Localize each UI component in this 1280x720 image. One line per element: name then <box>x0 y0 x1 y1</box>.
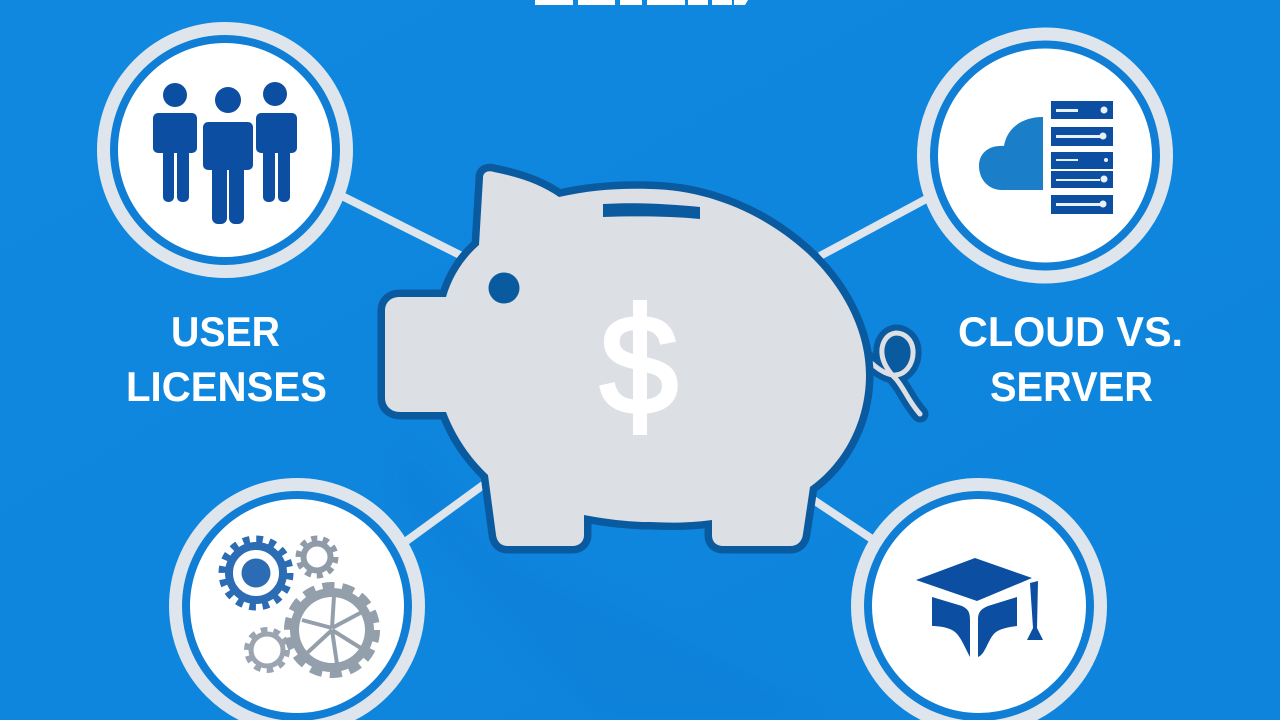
heading: user licenses: LICENSES <box>126 363 327 410</box>
icon: lower gray gear <box>247 630 287 670</box>
connector lines <box>340 195 930 542</box>
icon: cloud <box>979 117 1043 190</box>
pig eye <box>488 272 520 304</box>
panel: training circle <box>858 484 1100 720</box>
icon: blue gear <box>222 539 290 607</box>
dollar sign: $ <box>600 286 678 443</box>
pig tail <box>866 333 920 414</box>
heading: cloud vs server: CLOUD VS. <box>958 308 1183 355</box>
pig body <box>385 171 866 546</box>
panel: gears circle <box>176 484 418 720</box>
icon: graduation cap <box>916 558 1043 657</box>
panel: user licenses circle <box>104 28 346 272</box>
top text fragment <box>535 0 748 5</box>
icon: small gray gear <box>298 538 336 576</box>
heading: cloud vs server: SERVER <box>990 363 1153 410</box>
panel: cloud vs server circle <box>924 34 1166 277</box>
piggy bank <box>385 171 920 546</box>
heading: user licenses: USER <box>171 308 280 355</box>
icon: server rack <box>1051 101 1113 214</box>
coin slot <box>603 203 700 219</box>
icon: large gray gear <box>288 586 376 674</box>
icon: three users <box>153 82 297 224</box>
